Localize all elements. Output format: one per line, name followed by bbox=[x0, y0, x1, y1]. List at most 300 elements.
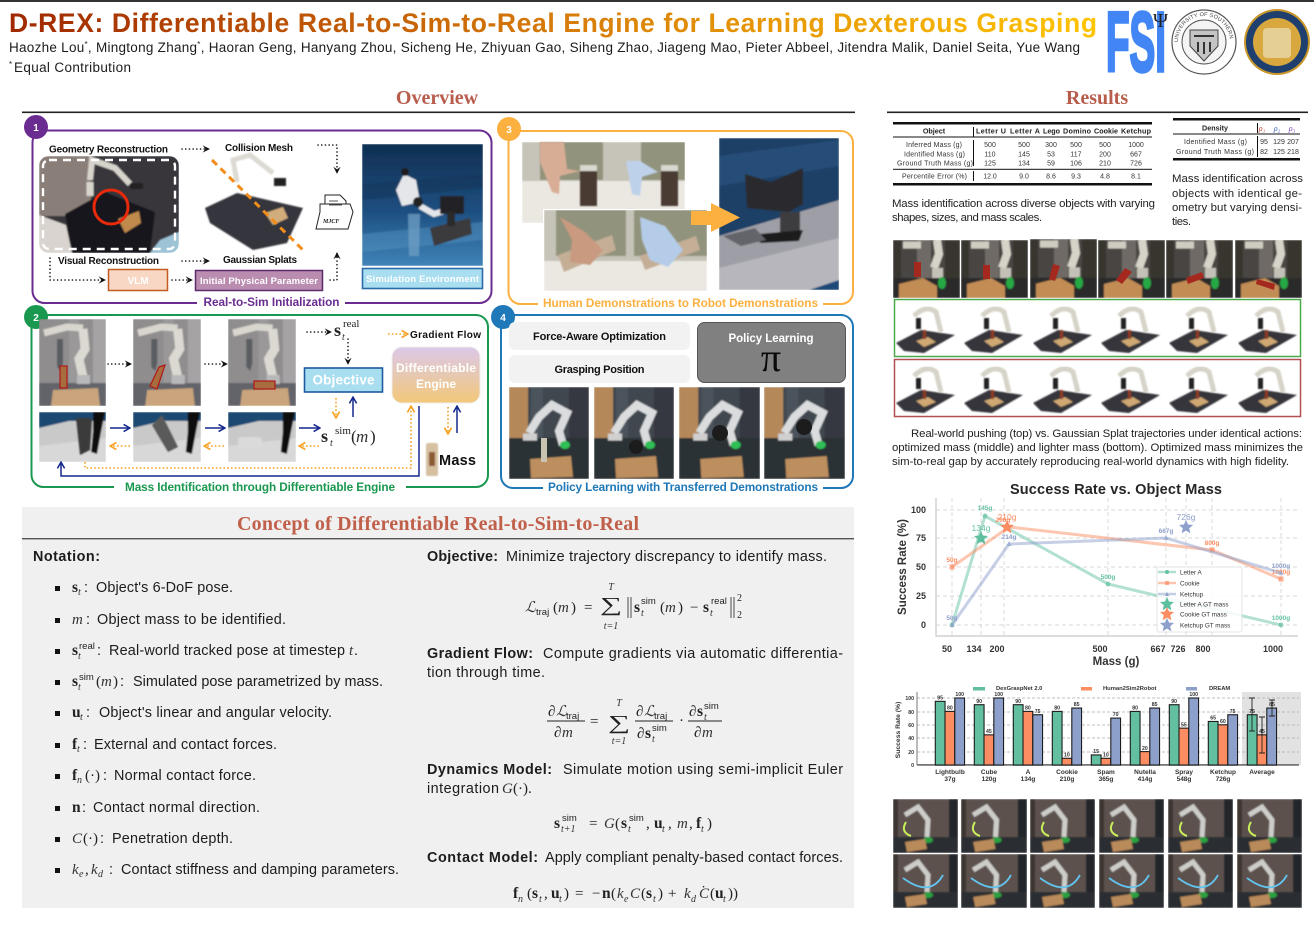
caption: table 2 bbox=[1172, 173, 1303, 228]
photo: policy frame 1 bbox=[509, 387, 589, 479]
equation: gradient chain rule: ∂ bbox=[554, 725, 561, 741]
equation: dynamics: t+1 bbox=[561, 824, 576, 835]
x axis labels: 800 bbox=[1195, 644, 1211, 654]
box: force-aware optimization bbox=[509, 322, 690, 350]
equation: gradient chain rule: s bbox=[697, 703, 703, 720]
equation: contact model: n bbox=[518, 894, 523, 905]
equation: contact model: )) bbox=[728, 886, 738, 902]
math: simulated state: s bbox=[321, 426, 328, 446]
equation: trajectory loss: ∑ bbox=[600, 594, 622, 616]
bar y axis: 100 bbox=[905, 696, 914, 702]
panel label: mass identification: Mass Identification through Differentiable Engine bbox=[125, 480, 395, 494]
equation: dynamics: = bbox=[589, 816, 597, 832]
item: stiffness and damping: , bbox=[85, 862, 89, 878]
equation: trajectory loss: 2 bbox=[737, 610, 742, 621]
step badge 3: 3 bbox=[506, 125, 512, 136]
equation: contact model: ) bbox=[658, 886, 663, 902]
group: spam: 70 bbox=[1113, 712, 1119, 718]
x axis labels: 500 bbox=[1092, 644, 1108, 654]
item: penetration depth: (·) bbox=[83, 831, 98, 847]
box: differentiable engine bbox=[392, 347, 480, 403]
group: A: 75 bbox=[1035, 709, 1041, 715]
x axis labels: 50 bbox=[942, 644, 952, 654]
caption: filmstrips: Real-world pushing (top) vs. Gaussian Splat trajectories under identical actions: bbox=[911, 428, 1302, 440]
panel label: real-to-sim initialization: Real-to-Sim Initialization bbox=[204, 295, 340, 309]
item: forces bbox=[55, 736, 277, 755]
logo: USC seal bbox=[1171, 9, 1237, 75]
marker: letter A ground truth bbox=[972, 523, 991, 544]
authors: , Haoran Geng, Hanyang Zhou, Sicheng He, Zhiyuan Gao, Siheng Zhao, Jiageng Mao, Pieter Abbeel, Jitendra Malik, Daniel Seita, Yue Wang bbox=[201, 40, 1080, 55]
authors bbox=[9, 40, 1080, 75]
item: normal force: n bbox=[77, 775, 82, 786]
equation: gradient chain rule: ∂ bbox=[689, 704, 696, 720]
chart: method comparison bars bbox=[895, 686, 1301, 783]
group: spray: 55 bbox=[1181, 722, 1187, 728]
image: simulation environment bbox=[362, 144, 483, 266]
chart legend bbox=[1157, 567, 1242, 632]
item: real pose: Real-world tracked pose at timestep bbox=[109, 643, 345, 659]
equation: contact model: ( bbox=[641, 886, 646, 902]
series: letter A bbox=[950, 505, 1290, 628]
box: VLM: VLM bbox=[127, 276, 149, 287]
chart title: Success Rate vs. Object Mass bbox=[1010, 482, 1222, 498]
panel 3: human demonstrations bbox=[497, 117, 853, 310]
row: inferred mass: 500 bbox=[1018, 142, 1030, 149]
photo: real frame 1 bbox=[39, 319, 106, 406]
authors: * bbox=[197, 40, 200, 49]
equation: dynamics: , bbox=[646, 816, 650, 832]
equation: dynamics: t bbox=[628, 824, 631, 835]
group: cube: 45 bbox=[986, 729, 992, 735]
equation: gradient chain rule: ∂ bbox=[694, 725, 701, 741]
caption: filmstrips bbox=[892, 428, 1303, 468]
item: stiffness and damping: : bbox=[109, 862, 113, 878]
equation: dynamics: G bbox=[604, 816, 615, 832]
item: pose: t bbox=[78, 587, 81, 598]
image: gaussian splat and mesh bbox=[205, 155, 303, 250]
equation: dynamics: ) bbox=[707, 816, 712, 832]
arrow: gradient from objective bbox=[335, 398, 337, 417]
item: stiffness and damping: Contact stiffness and damping parameters. bbox=[121, 862, 399, 878]
arrow: sim state to objective bbox=[352, 398, 354, 417]
group: cookie bbox=[1052, 702, 1082, 783]
marker: ketchup ground truth bbox=[1177, 512, 1196, 533]
math: simulated state: t bbox=[330, 438, 333, 449]
item: stiffness and damping: k bbox=[72, 862, 79, 878]
table header: Letter U bbox=[976, 126, 1006, 136]
authors: * bbox=[9, 60, 12, 69]
bar legend: Human2Sim2Robot bbox=[1103, 686, 1157, 692]
row: identified mass: 200 bbox=[1099, 152, 1111, 158]
gradient flow text: Compute gradients via automatic differentia- bbox=[543, 646, 843, 662]
item: pose: s bbox=[72, 579, 78, 596]
arrow: real state to objective bbox=[347, 339, 349, 364]
math: real state: t bbox=[342, 332, 345, 343]
item: normal force: f bbox=[72, 767, 78, 784]
heading: concept: Concept of Differentiable Real-to-Sim-to-Real bbox=[237, 513, 639, 535]
equation: gradient chain rule: s bbox=[645, 725, 651, 742]
sim frame 3 bbox=[228, 412, 296, 462]
arrow: to VLM bbox=[50, 258, 105, 280]
math: simulated state bbox=[321, 425, 376, 449]
item: stiffness and damping: e bbox=[79, 869, 84, 880]
row: identified: 129 bbox=[1273, 139, 1285, 146]
item: normal direction: : bbox=[82, 800, 86, 816]
equation: contact model: t bbox=[723, 894, 726, 905]
row: identified mass: 53 bbox=[1047, 152, 1055, 158]
row: ground truth mass: 726 bbox=[1130, 160, 1142, 168]
table: density: ρ₁ bbox=[1258, 124, 1266, 133]
equation: trajectory loss: − bbox=[690, 600, 698, 616]
item: stiffness and damping: d bbox=[98, 869, 104, 880]
row: identified bbox=[1184, 139, 1299, 146]
item: real pose bbox=[55, 641, 358, 662]
authors: Equal Contribution bbox=[14, 60, 131, 75]
box: differentiable engine: Engine bbox=[416, 377, 456, 391]
box: force-aware optimization: Force-Aware Optimization bbox=[533, 331, 666, 343]
table header: Domino bbox=[1063, 126, 1092, 136]
panel: concept bbox=[22, 507, 854, 908]
photo: captured scene bbox=[39, 156, 179, 253]
row: inferred mass bbox=[906, 142, 1144, 149]
equation: contact model: t bbox=[559, 894, 562, 905]
equation: contact model: t bbox=[653, 894, 656, 905]
series: ketchup: 50g bbox=[946, 615, 958, 622]
group: cube: 100 bbox=[994, 692, 1003, 698]
y axis labels: 50 bbox=[916, 562, 926, 572]
sim frame 2 bbox=[133, 412, 201, 462]
group: A: A bbox=[1026, 769, 1031, 776]
contact model text: Contact Model: bbox=[427, 850, 538, 866]
row: inferred mass: 300 bbox=[1045, 142, 1057, 149]
row: inferred mass: 500 bbox=[1099, 142, 1111, 149]
table header: Ketchup bbox=[1121, 126, 1152, 136]
box: policy learning: π bbox=[761, 335, 781, 380]
heading: results: Results bbox=[1066, 87, 1128, 109]
equation: trajectory loss: = bbox=[584, 600, 592, 616]
bar y axis: 40 bbox=[908, 736, 914, 742]
authors: , Mingtong Zhang bbox=[88, 40, 197, 55]
x axis labels: 667 bbox=[1150, 644, 1166, 654]
table header: Cookie bbox=[1094, 126, 1118, 136]
equation: dynamics: f bbox=[696, 815, 702, 832]
group: A: 80 bbox=[1025, 706, 1031, 712]
chart legend: Cookie bbox=[1180, 580, 1200, 588]
equation: dynamics: sim bbox=[562, 813, 577, 824]
equation: gradient chain rule: ∂ bbox=[637, 726, 644, 742]
equation: trajectory loss: s bbox=[634, 599, 640, 616]
bar y axis: 80 bbox=[908, 710, 914, 716]
arrow: to real state bbox=[307, 331, 331, 333]
equation: dynamics: s bbox=[554, 815, 560, 832]
math: simulated state: m bbox=[356, 427, 368, 446]
equation: trajectory loss: m bbox=[558, 600, 569, 616]
filmstrip: lighter mass bbox=[894, 360, 1300, 416]
average highlight bbox=[1242, 692, 1301, 765]
row: percentile error: 12.0 bbox=[983, 174, 997, 180]
panel 4: policy learning bbox=[491, 305, 853, 494]
chart grid bbox=[936, 498, 1298, 636]
item: forces: t bbox=[77, 744, 80, 755]
group: cookie: 85 bbox=[1074, 702, 1080, 708]
item: forces: External and contact forces. bbox=[94, 737, 277, 753]
equation: dynamics: t bbox=[701, 824, 704, 835]
group: spray: 548g bbox=[1177, 776, 1191, 783]
item: velocity: : bbox=[86, 705, 90, 721]
y axis labels: 0 bbox=[921, 620, 926, 630]
dynamics model text: integration bbox=[427, 781, 499, 797]
item: penetration depth: : bbox=[100, 831, 104, 847]
equation: gradient chain rule bbox=[547, 698, 722, 747]
contact model text: Apply compliant penalty-based contact forces. bbox=[545, 850, 843, 866]
box: initial physical parameter: Initial Physical Parameter bbox=[200, 276, 318, 287]
equation: contact model: f bbox=[513, 885, 519, 902]
bar y axis: Success Rate (%) bbox=[895, 702, 902, 758]
arrow: to collision mesh bbox=[182, 148, 209, 150]
x axis labels: 1000 bbox=[1263, 644, 1283, 654]
panel 1: real-to-sim initialization bbox=[24, 115, 492, 309]
item: normal force: (·) bbox=[85, 768, 100, 784]
equation: trajectory loss: ( bbox=[553, 600, 558, 616]
group: average with error bars: 85 bbox=[1269, 702, 1275, 708]
y axis labels: 100 bbox=[911, 505, 926, 515]
series: ketchup: 667g bbox=[1159, 528, 1173, 535]
equation: gradient chain rule: m bbox=[702, 725, 713, 741]
image: simulated robot hand bbox=[719, 138, 839, 290]
series: letter A: 500g bbox=[1101, 574, 1115, 581]
bar y axis: 0 bbox=[911, 763, 914, 769]
table: density: Density bbox=[1202, 124, 1228, 132]
group: cookie: 10 bbox=[1064, 752, 1070, 758]
item: real pose: t bbox=[349, 643, 354, 659]
group: spam: 10 bbox=[1103, 752, 1109, 758]
equation: contact model: C bbox=[630, 886, 641, 902]
equation: trajectory loss: T bbox=[608, 582, 615, 593]
equation: trajectory loss: s bbox=[703, 599, 709, 616]
item: mass: m bbox=[72, 612, 83, 628]
step badge 1 bbox=[24, 115, 48, 139]
group: cookie: 210g bbox=[1060, 776, 1074, 783]
equation: contact model: s bbox=[532, 885, 538, 902]
equation: trajectory loss: traj bbox=[536, 607, 549, 618]
item: real pose: real bbox=[79, 641, 95, 652]
table header bbox=[923, 126, 1152, 136]
notation column bbox=[33, 549, 399, 880]
group: A bbox=[1013, 699, 1043, 783]
x axis labels bbox=[942, 644, 1283, 668]
x axis labels: Mass (g) bbox=[1093, 656, 1139, 668]
group: average with error bars: 45 bbox=[1259, 729, 1265, 735]
gradient flow text: Gradient Flow: bbox=[427, 646, 533, 662]
group: ketchup: 726g bbox=[1216, 776, 1230, 783]
x axis labels: 200 bbox=[989, 644, 1005, 654]
photo: real frame 2 bbox=[133, 319, 201, 406]
page top border bbox=[0, 0, 1314, 2]
group: ketchup: 60 bbox=[1220, 719, 1226, 725]
arrows: real frames bbox=[108, 363, 227, 365]
box: VLM bbox=[108, 270, 168, 290]
step badge 3 bbox=[497, 117, 521, 141]
group: lightbulb: Lightbulb bbox=[935, 769, 965, 776]
caption: table 2: Mass identification across bbox=[1172, 173, 1303, 185]
group: nutella: Nutella bbox=[1134, 769, 1156, 776]
group: ketchup bbox=[1208, 709, 1238, 783]
step badge 4: 4 bbox=[500, 313, 506, 324]
table header: Object bbox=[923, 126, 946, 136]
label: gaussian splats: Gaussian Splats bbox=[223, 255, 297, 266]
row: inferred mass: 1000 bbox=[1128, 142, 1144, 149]
caption: table 1: Mass identification across diverse objects with varying bbox=[892, 198, 1155, 210]
equation: contact model bbox=[513, 884, 738, 905]
math: real state: real bbox=[343, 318, 359, 330]
item: penetration depth: Penetration depth. bbox=[112, 831, 233, 847]
gradient flow text bbox=[427, 646, 843, 681]
equation: gradient chain rule: ℒ bbox=[644, 702, 656, 720]
item: real pose: : bbox=[97, 643, 101, 659]
chart legend: Letter A GT mass bbox=[1180, 602, 1229, 608]
equation: gradient chain rule: traj bbox=[566, 711, 579, 722]
equation: contact model: t bbox=[539, 894, 542, 905]
box: policy learning: Policy Learning bbox=[728, 333, 814, 345]
chart legend: Ketchup bbox=[1180, 592, 1204, 598]
bar y axis bbox=[895, 696, 914, 769]
equation: contact model: = bbox=[575, 886, 583, 902]
group: cube: Cube bbox=[981, 769, 998, 776]
equation: gradient chain rule: t bbox=[704, 712, 707, 723]
row: ground truth: 82 bbox=[1260, 149, 1268, 156]
dynamics model text: (·). bbox=[513, 781, 532, 797]
caption: table 2: objects with identical ge- bbox=[1172, 188, 1302, 200]
bar y axis: 20 bbox=[908, 750, 914, 756]
equation: contact model: ( bbox=[710, 886, 715, 902]
series: ketchup: 214g bbox=[1002, 534, 1016, 541]
item: stiffness and damping: k bbox=[91, 862, 98, 878]
row: ground truth mass: 125 bbox=[984, 160, 996, 168]
arrows: backward gradients bbox=[111, 445, 319, 447]
row: identified: 95 bbox=[1260, 139, 1268, 146]
item: normal force: : bbox=[103, 768, 107, 784]
item: real pose: . bbox=[354, 643, 358, 659]
series: ketchup bbox=[946, 528, 1290, 627]
math: simulated state: sim bbox=[335, 425, 351, 437]
group: A: 134g bbox=[1021, 776, 1035, 783]
table: mass identification across objects bbox=[893, 122, 1152, 186]
item: forces: : bbox=[83, 737, 87, 753]
marker: cookie ground truth: 210g bbox=[998, 512, 1017, 522]
caption: table 2: ties. bbox=[1172, 216, 1191, 228]
gradient flow text: tion through time. bbox=[427, 665, 545, 681]
arrow: mass to engine bbox=[456, 407, 458, 433]
equation: dynamics: m bbox=[677, 816, 688, 832]
group: spray: 90 bbox=[1171, 699, 1177, 705]
equation: trajectory loss: ℒ bbox=[525, 598, 537, 616]
equation: trajectory loss: real bbox=[711, 596, 727, 607]
item: simulated pose: m bbox=[101, 674, 112, 690]
group: average with error bars: 75 bbox=[1249, 709, 1255, 715]
equation: dynamics: , bbox=[689, 816, 693, 832]
item: simulated pose bbox=[55, 672, 383, 693]
box: simulation environment bbox=[362, 268, 482, 288]
icon: MJCF file bbox=[316, 195, 353, 229]
group: cookie: 80 bbox=[1054, 706, 1060, 712]
item: simulated pose: : bbox=[120, 674, 124, 690]
equation: contact model: k bbox=[617, 886, 624, 902]
dynamics model text: G bbox=[502, 781, 513, 797]
objective text: Minimize trajectory discrepancy to identify mass. bbox=[506, 549, 827, 565]
item: penetration depth: C bbox=[72, 831, 83, 847]
math: simulated state: ( bbox=[351, 427, 357, 446]
arrow: gradient loop bbox=[85, 407, 411, 468]
group: nutella: 85 bbox=[1152, 702, 1158, 708]
row: ground truth mass: 106 bbox=[1070, 160, 1082, 168]
equation: contact model: ( bbox=[527, 886, 532, 902]
equation: contact model: + bbox=[668, 886, 676, 902]
equation: contact model: u bbox=[715, 885, 724, 902]
equation: gradient chain rule: = bbox=[590, 714, 598, 730]
bar grid and axes bbox=[917, 692, 1299, 766]
equation: gradient chain rule: ℒ bbox=[556, 702, 568, 720]
box: objective: Objective bbox=[312, 372, 375, 388]
row: ground truth: 125 bbox=[1273, 149, 1285, 156]
group: cube: 120g bbox=[982, 776, 996, 783]
heading: notation: Notation: bbox=[33, 549, 100, 565]
arrow: to gaussian splats bbox=[182, 260, 209, 262]
caption: table 1 bbox=[892, 198, 1155, 224]
row: percentile error: 8.1 bbox=[1131, 174, 1141, 180]
item: simulated pose: ) bbox=[113, 674, 118, 690]
caption: filmstrips: sim-to-real gap by accurately reproducing real-world dynamics with high fidelity. bbox=[892, 456, 1289, 468]
item: mass: : bbox=[86, 612, 90, 628]
equation: contact model: k bbox=[684, 886, 691, 902]
equation: gradient chain rule: sim bbox=[704, 701, 719, 712]
dynamics model text bbox=[427, 762, 843, 797]
equation: contact model: ) bbox=[564, 886, 569, 902]
equation: gradient chain rule: t=1 bbox=[612, 736, 626, 747]
group: spray bbox=[1169, 692, 1199, 783]
photo: real frame 3 bbox=[228, 319, 296, 406]
label: visual reconstruction: Visual Reconstruction bbox=[58, 256, 159, 267]
box: grasping position: Grasping Position bbox=[554, 364, 645, 376]
equation: contact model: ˙ bbox=[701, 884, 706, 900]
equation: gradient chain rule: traj bbox=[654, 711, 667, 722]
group: lightbulb: 37g bbox=[944, 776, 956, 783]
group: spam: 365g bbox=[1099, 776, 1113, 783]
label: collision mesh: Collision Mesh bbox=[225, 143, 293, 154]
chart legend: Ketchup GT mass bbox=[1180, 622, 1230, 630]
equation: gradient chain rule: t bbox=[652, 734, 655, 745]
item: simulated pose: sim bbox=[79, 672, 94, 683]
box: policy learning bbox=[698, 322, 846, 382]
equation: gradient chain rule: sim bbox=[652, 723, 667, 734]
group: ketchup: 65 bbox=[1210, 716, 1216, 722]
row: ground truth mass: 59 bbox=[1047, 160, 1055, 168]
row: identified mass: 110 bbox=[984, 152, 996, 158]
equation: dynamics: t bbox=[662, 824, 665, 835]
item: pose bbox=[55, 579, 233, 598]
equation: contact model: s bbox=[646, 885, 652, 902]
row: identified mass: 117 bbox=[1070, 152, 1082, 158]
series: cookie: 50g bbox=[946, 557, 958, 564]
item: simulated pose: s bbox=[72, 673, 78, 690]
series: cookie bbox=[946, 517, 1290, 582]
image: mass object bbox=[426, 443, 438, 476]
photo: policy frame 2 bbox=[594, 387, 674, 479]
equation: gradient chain rule: T bbox=[616, 698, 623, 709]
chart legend: Cookie GT mass bbox=[1180, 612, 1227, 618]
row: ground truth bbox=[1176, 149, 1299, 156]
group: spam bbox=[1091, 712, 1121, 783]
equation: gradient chain rule: ∂ bbox=[636, 704, 643, 720]
